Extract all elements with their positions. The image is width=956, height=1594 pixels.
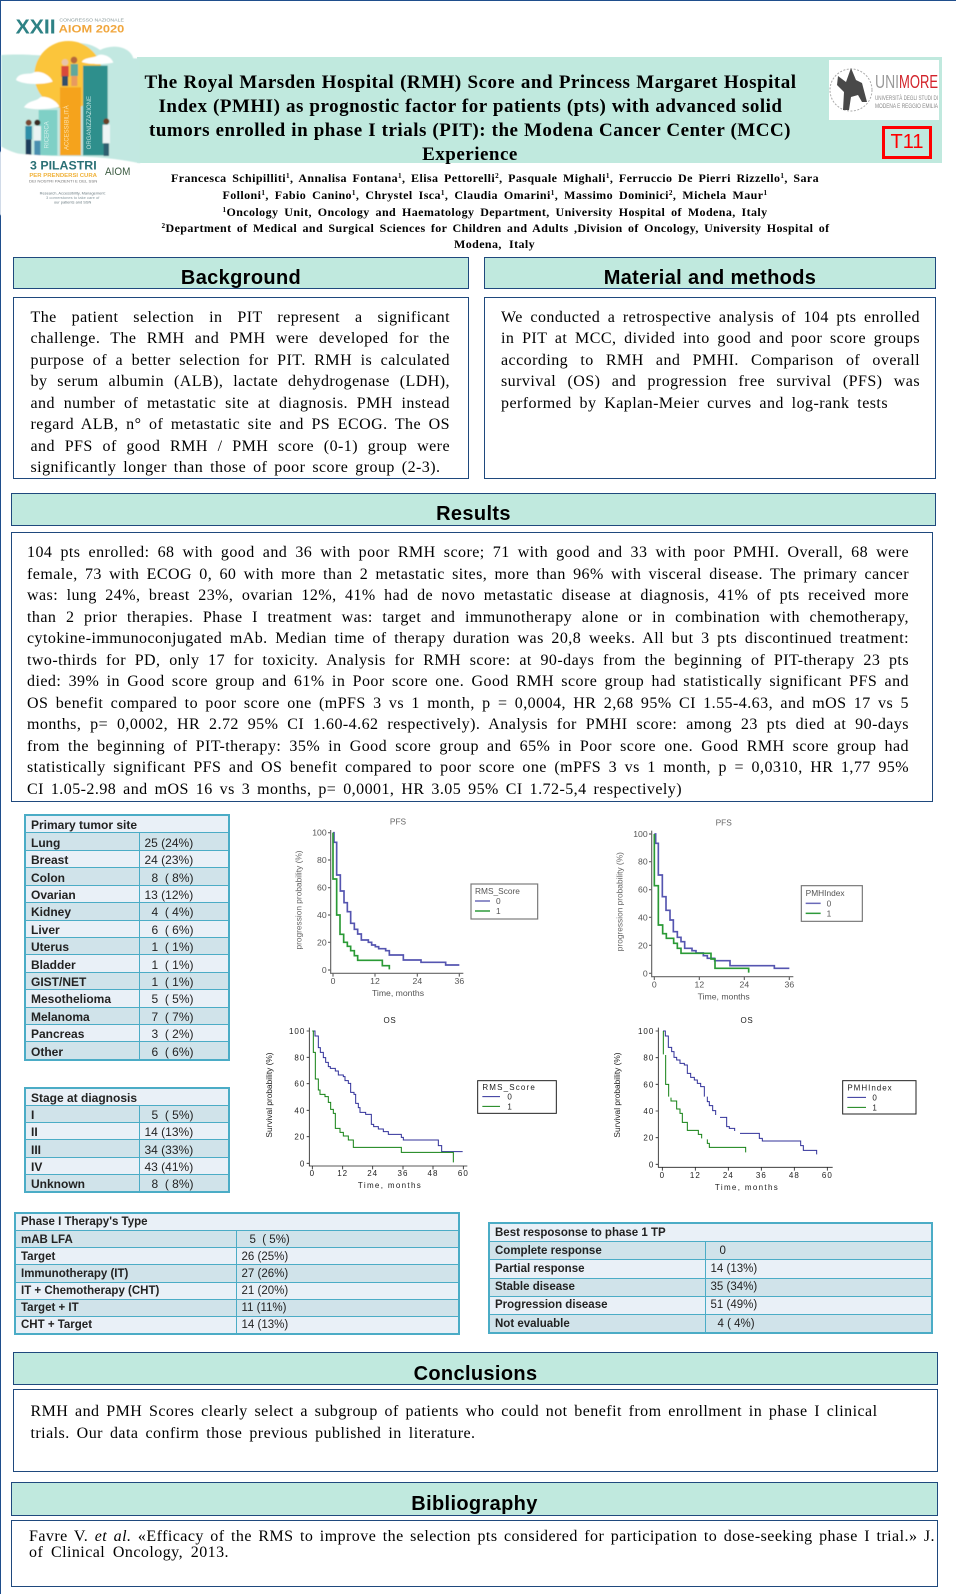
table: phase I therapy type: 26 (25%) bbox=[242, 1251, 288, 1263]
panel: material and methods: We conducted a retrospective analysis of 104 pts enrolled bbox=[501, 308, 920, 326]
chart: OS by PMH index: 20 bbox=[643, 1134, 654, 1143]
chart: PFS by RMS score: 12 bbox=[370, 976, 380, 986]
chart: PFS by PMH index: 20 bbox=[638, 940, 648, 950]
panel: conclusions: trials. Our data confirm those previous published in literature. bbox=[30, 1424, 476, 1442]
table: primary tumor site: 1 ( 1%) bbox=[152, 975, 194, 989]
chart: OS by RMS score bbox=[264, 1016, 556, 1190]
chart: PFS by RMS score: progression probability (%) bbox=[294, 850, 304, 950]
heading: results bbox=[11, 493, 936, 526]
chart: OS by PMH index: 60 bbox=[643, 1080, 654, 1089]
authors and affiliations: Folloni1, Fabio Canino1, Chrystel Isca1, Claudia Omarini1, Massimo Dominici2, Michela Maur1 bbox=[222, 188, 767, 202]
panel: bibliography: Favre V. et al. «Efficacy of the RMS to improve the selection pts considered for participation to dose-seeking phase I trial.» J. bbox=[29, 1528, 935, 1545]
chart: PFS by PMH index: 40 bbox=[638, 912, 648, 922]
table: stage at diagnosis: 14 (13%) bbox=[144, 1125, 193, 1139]
chart: OS by RMS score: 12 bbox=[337, 1169, 348, 1178]
heading: conclusions: Conclusions bbox=[414, 1363, 537, 1385]
chart: OS by RMS score: OS bbox=[384, 1016, 396, 1025]
table: primary tumor site: GIST/NET bbox=[31, 975, 86, 989]
chart: OS by RMS score: 0 bbox=[507, 1093, 512, 1102]
table: stage at diagnosis: Unknown bbox=[31, 1177, 85, 1191]
table: best response to phase 1 TP: Stable disease bbox=[495, 1281, 575, 1293]
table: best response to phase 1 TP: 51 (49%) bbox=[710, 1299, 757, 1311]
chart: PFS by PMH index: 100 bbox=[633, 829, 648, 839]
chart: OS by RMS score: 60 bbox=[294, 1080, 305, 1089]
chart: OS by PMH index: 0 bbox=[872, 1093, 877, 1102]
table: stage at diagnosis: I bbox=[31, 1108, 34, 1122]
university logo: MODENA E REGGIO EMILIA bbox=[875, 104, 938, 110]
panel: results: CI 1.05-2.98 and mOS 16 vs 3 months, p= 0,0001, HR 3.05 95% CI 1.72-5,4 respectively) bbox=[27, 780, 682, 798]
table: primary tumor site: Uterus bbox=[31, 940, 69, 954]
chart: PFS by RMS score: PFS bbox=[390, 817, 407, 827]
chart: OS by PMH index: 12 bbox=[690, 1171, 701, 1180]
table: best response to phase 1 TP: Best resposonse to phase 1 TP bbox=[495, 1227, 666, 1239]
table: primary tumor site: 4 ( 4%) bbox=[152, 905, 194, 919]
chart: PFS by PMH index: 1 bbox=[827, 908, 832, 918]
panel: results: 104 pts enrolled: 68 with good and 36 with poor RMH score; 71 with good and 33 with poor PMHI. Overall, 68 were bbox=[27, 544, 909, 561]
title: tumors enrolled in phase I trials (PIT): the Modena Cancer Center (MCC) bbox=[149, 120, 791, 141]
table: primary tumor site: Colon bbox=[31, 870, 65, 884]
chart: PFS by RMS score: 36 bbox=[455, 976, 464, 986]
chart: OS by RMS score: 36 bbox=[398, 1169, 408, 1178]
table: primary tumor site: Pancreas bbox=[31, 1027, 84, 1041]
chart: PFS by RMS score bbox=[294, 817, 538, 998]
chart: PFS by RMS score: 0 bbox=[496, 896, 501, 906]
chart: PFS by RMS score: 24 bbox=[413, 976, 422, 986]
table: primary tumor site: Primary tumor site bbox=[31, 818, 137, 832]
authors and affiliations: 2Department of Medical and Surgical Sciences for Children and Adults ,Division of Oncology, University Hospital of bbox=[162, 221, 830, 235]
panel: results: from the beginning of PIT-therapy: 35% in Good score group and 65% in Poor score one. Good RMH score group had bbox=[27, 738, 909, 754]
chart: PFS by RMS score: 100 bbox=[312, 828, 327, 838]
chart: PFS by PMH index: PMHIndex bbox=[806, 888, 845, 898]
chart: PFS by PMH index: 80 bbox=[638, 857, 648, 867]
heading: bibliography bbox=[11, 1482, 938, 1516]
chart: PFS by RMS score: 1 bbox=[496, 906, 501, 916]
chart: OS by RMS score: 24 bbox=[367, 1169, 378, 1178]
heading: material and methods bbox=[484, 257, 936, 289]
table: primary tumor site: Liver bbox=[31, 923, 60, 937]
panel: bibliography: of Clinical Oncology, 2013. bbox=[29, 1544, 229, 1561]
chart: OS by RMS score: 1 bbox=[507, 1102, 512, 1111]
table: best response to phase 1 TP: 14 (13%) bbox=[710, 1263, 757, 1275]
chart: OS by PMH index: 1 bbox=[872, 1103, 877, 1112]
chart: OS by PMH index: 100 bbox=[638, 1027, 654, 1036]
table: phase I therapy type: 11 (11%) bbox=[242, 1302, 286, 1314]
poster heading: PER PRENDERSI CURA bbox=[29, 173, 97, 179]
table: phase I therapy type: 14 (13%) bbox=[242, 1319, 288, 1331]
panel: results: than 2 prior therapies. Phase I treatment was: target and immunotherapy alone or in combination with chemotherapy, bbox=[27, 608, 909, 626]
chart: PFS by PMH index: 12 bbox=[695, 979, 704, 989]
panel: material and methods bbox=[484, 297, 936, 479]
table: phase I therapy type: Target + IT bbox=[21, 1302, 79, 1314]
table: phase I therapy type bbox=[14, 1212, 460, 1335]
chart: OS by RMS score: 100 bbox=[289, 1027, 305, 1036]
table: primary tumor site bbox=[24, 814, 230, 1061]
chart: PFS by PMH index: 0 bbox=[652, 979, 657, 989]
table: best response to phase 1 TP: Not evaluable bbox=[495, 1318, 570, 1330]
table: primary tumor site: 8 ( 8%) bbox=[152, 870, 194, 884]
table: phase I therapy type: 21 (20%) bbox=[242, 1285, 288, 1297]
poster heading: RICERCA bbox=[45, 121, 51, 148]
chart: OS by RMS score: RMS_Score bbox=[482, 1083, 536, 1092]
chart: OS by RMS score: 20 bbox=[294, 1133, 305, 1142]
university logo: MORE bbox=[899, 72, 938, 92]
poster heading: AIOM 2020 bbox=[59, 24, 124, 36]
title bbox=[144, 72, 796, 165]
chart: OS by RMS score: 60 bbox=[458, 1169, 469, 1178]
table: primary tumor site: 24 (23%) bbox=[144, 853, 193, 867]
panel: background: The patient selection in PIT represent a significant bbox=[30, 308, 450, 326]
chart: PFS by RMS score: 80 bbox=[317, 855, 327, 865]
chart: OS by PMH index bbox=[612, 1016, 916, 1192]
table: stage at diagnosis: 8 ( 8%) bbox=[152, 1177, 194, 1191]
chart: OS by PMH index: 0 bbox=[660, 1171, 665, 1180]
panel: material and methods: according to RMH and PMHI. Comparison of overall bbox=[501, 352, 920, 369]
panel: results: months, p= 0,0002, HR 2.72 95% CI 1.60-4.62 respectively). Analysis for PMHI score: among 23 pts died at 90-days bbox=[27, 716, 909, 733]
badge T11 bbox=[882, 126, 932, 159]
heading: background: Background bbox=[181, 267, 301, 289]
table: stage at diagnosis: 43 (41%) bbox=[144, 1160, 193, 1174]
chart: OS by PMH index: OS bbox=[741, 1016, 753, 1025]
chart: PFS by RMS score: 40 bbox=[317, 910, 327, 920]
chart: OS by PMH index: Survival probability (%) bbox=[612, 1052, 622, 1138]
poster heading: CONGRESSO NAZIONALE bbox=[59, 18, 124, 23]
table: primary tumor site: 5 ( 5%) bbox=[152, 992, 194, 1006]
badge T11: T11 bbox=[890, 131, 923, 153]
poster heading: our patients and SSN bbox=[54, 201, 92, 205]
table: phase I therapy type: CHT + Target bbox=[21, 1319, 92, 1331]
table: primary tumor site: 3 ( 2%) bbox=[152, 1027, 194, 1041]
congress poster logo bbox=[0, 16, 140, 216]
table: primary tumor site: Bladder bbox=[31, 958, 76, 972]
table: stage at diagnosis: Stage at diagnosis bbox=[31, 1091, 137, 1105]
table: phase I therapy type: Target bbox=[21, 1251, 55, 1263]
charts: RMH score survival curves bbox=[264, 817, 557, 1190]
chart: OS by PMH index: 36 bbox=[756, 1171, 767, 1180]
panel: results: two-thirds for PD, only 17 for toxicity. Analysis for RMH score: at 90-days from the beginning of PIT-therapy 23 pts bbox=[27, 652, 909, 668]
panel: results: female, 73 with ECOG 0, 60 with more than 2 metastatic sites, more than 96% with visceral disease. The primary cancer bbox=[27, 566, 909, 582]
chart: PFS by PMH index: PFS bbox=[716, 817, 732, 827]
poster heading: 3 cornerstones to take care of bbox=[46, 196, 99, 200]
panel: results: cytokine-immunoconjugated mAb. Median time of therapy duration was 20,8 weeks. All but 3 pts discontinued treatment: bbox=[27, 630, 909, 647]
panel: material and methods: in PIT at MCC, divided into good and poor score groups bbox=[501, 330, 920, 347]
heading: conclusions bbox=[13, 1352, 938, 1385]
authors and affiliations bbox=[162, 171, 830, 251]
panel: background: regard ALB, n° of metastatic site and PS ECOG. The OS bbox=[30, 416, 450, 433]
panel: results: was: lung 24%, breast 23%, ovarian 12%, 41% had de novo metastatic disease at diagnosis, 41% of pts received more bbox=[27, 587, 909, 604]
table: best response to phase 1 TP: Complete response bbox=[495, 1245, 602, 1257]
table: stage at diagnosis: III bbox=[31, 1143, 41, 1157]
poster heading: XXII bbox=[16, 16, 56, 39]
chart: PFS by RMS score: 20 bbox=[317, 937, 327, 947]
table: phase I therapy type: mAB LFA bbox=[21, 1234, 73, 1246]
chart: OS by PMH index: 0 bbox=[649, 1160, 654, 1169]
table: primary tumor site: Mesothelioma bbox=[31, 992, 111, 1006]
panel: material and methods: survival (OS) and progression free survival (PFS) was bbox=[501, 373, 920, 390]
chart: PFS by RMS score: 0 bbox=[322, 965, 327, 975]
panel: bibliography bbox=[11, 1520, 938, 1587]
chart: OS by RMS score: 40 bbox=[294, 1106, 305, 1115]
university logo bbox=[829, 60, 939, 120]
title: The Royal Marsden Hospital (RMH) Score and Princess Margaret Hospital bbox=[144, 72, 796, 93]
chart: OS by RMS score: 48 bbox=[428, 1169, 438, 1178]
poster heading bbox=[16, 16, 130, 205]
authors and affiliations: Francesca Schipilliti1, Annalisa Fontana1, Elisa Pettorelli2, Pasquale Mighali1, Ferruccio De Pierri Rizzello1, Sara bbox=[171, 171, 819, 185]
heading: background bbox=[13, 257, 469, 289]
chart: PFS by PMH index: 60 bbox=[638, 885, 648, 895]
chart: OS by PMH index: 60 bbox=[822, 1171, 833, 1180]
poster heading: DEI NOSTRI PAZIENTI E DEL SSN bbox=[29, 179, 98, 183]
table: primary tumor site: Ovarian bbox=[31, 888, 76, 902]
table: stage at diagnosis: II bbox=[31, 1125, 38, 1139]
table: best response to phase 1 TP: 4 ( 4%) bbox=[718, 1318, 755, 1330]
chart: OS by PMH index: 40 bbox=[643, 1107, 654, 1116]
panel: conclusions bbox=[13, 1389, 938, 1472]
title: Index (PMHI) as prognostic factor for patients (pts) with advanced solid bbox=[158, 96, 782, 117]
chart: OS by RMS score: 0 bbox=[310, 1169, 315, 1178]
panel: background: by serum albumin (ALB), lactate dehydrogenase (LDH), bbox=[30, 373, 450, 390]
table: primary tumor site: 25 (24%) bbox=[144, 836, 193, 850]
table: stage at diagnosis bbox=[24, 1087, 230, 1193]
table: stage at diagnosis: 5 ( 5%) bbox=[152, 1108, 194, 1122]
chart: OS by PMH index: PMHIndex bbox=[847, 1084, 893, 1093]
panel: material and methods: performed by Kaplan-Meier curves and log-rank tests bbox=[501, 395, 888, 412]
panel: results: died: 39% in Good score group and 61% in Poor score one. Good RMH score group had statistically significant PFS and bbox=[27, 673, 909, 690]
heading: material and methods: Material and methods bbox=[604, 267, 816, 289]
panel: conclusions: RMH and PMH Scores clearly select a subgroup of patients who could not benefit from enrollment in phase I clinical bbox=[30, 1402, 878, 1420]
chart: OS by RMS score: Survival probability (%) bbox=[264, 1052, 274, 1138]
table: best response to phase 1 TP: Partial response bbox=[495, 1263, 584, 1275]
authors and affiliations: 1Oncology Unit, Oncology and Haematology Department, University Hospital of Modena, Italy bbox=[222, 205, 768, 219]
heading: results: Results bbox=[436, 503, 511, 525]
chart: OS by PMH index: Time, months bbox=[715, 1183, 779, 1192]
table: phase I therapy type: Phase I Therapy's Type bbox=[21, 1216, 148, 1228]
chart: PFS by PMH index: Time, months bbox=[698, 992, 750, 1002]
panel: background: and PFS of good RMH / PMH score (0-1) group were bbox=[30, 438, 450, 455]
university logo: UNIVERSITÀ DEGLI STUDI DI bbox=[875, 95, 938, 102]
chart: PFS by PMH index: 0 bbox=[643, 968, 648, 978]
table: stage at diagnosis: IV bbox=[31, 1160, 42, 1174]
table: stage at diagnosis: 34 (33%) bbox=[144, 1143, 193, 1157]
table: phase I therapy type: Immunotherapy (IT) bbox=[21, 1268, 128, 1280]
panel: results: statistically significant PFS and OS benefit compared to poor score one (mPFS 3 vs 1 month, p = 0,0310, HR 1,77 95% bbox=[27, 759, 909, 776]
table: primary tumor site: Melanoma bbox=[31, 1010, 90, 1024]
panel: background: purpose of a better selection for PIT. RMH is calculated bbox=[30, 352, 450, 369]
university logo: UNI bbox=[875, 72, 899, 92]
table: best response to phase 1 TP: 0 bbox=[720, 1245, 726, 1257]
chart: OS by RMS score: Time, months bbox=[358, 1181, 422, 1190]
panel: results: OS benefit compared to poor score one (mPFS 3 vs 1 month, p = 0,0004, HR 2,68 95% CI 1.55-4.63, and mOS 17 vs 5 bbox=[27, 694, 909, 712]
table: primary tumor site: 6 ( 6%) bbox=[152, 1045, 194, 1059]
poster heading: 3 PILASTRI bbox=[30, 159, 97, 173]
panel: background: challenge. The RMH and PMH were developed for the bbox=[30, 330, 450, 347]
panel: background: significantly longer than those of poor score group (2-3). bbox=[30, 459, 440, 476]
panel: background bbox=[13, 297, 469, 479]
chart: PFS by PMH index bbox=[614, 817, 862, 1002]
poster heading: ACCESSIBILITÀ bbox=[64, 105, 71, 150]
table: best response to phase 1 TP: Progression disease bbox=[495, 1299, 608, 1311]
charts: PMH index survival curves bbox=[612, 817, 916, 1192]
table: primary tumor site: 1 ( 1%) bbox=[152, 958, 194, 972]
table: best response to phase 1 TP bbox=[488, 1222, 933, 1334]
authors and affiliations: Modena, Italy bbox=[454, 237, 535, 251]
chart: PFS by PMH index: 36 bbox=[785, 979, 794, 989]
chart: OS by PMH index: 24 bbox=[723, 1171, 734, 1180]
chart: OS by RMS score: 0 bbox=[300, 1159, 305, 1168]
table: primary tumor site: Breast bbox=[31, 853, 68, 867]
chart: OS by PMH index: 48 bbox=[789, 1171, 800, 1180]
chart: PFS by RMS score: Time, months bbox=[372, 988, 425, 998]
poster heading: AIOM bbox=[105, 166, 130, 178]
table: primary tumor site: 1 ( 1%) bbox=[152, 940, 194, 954]
poster heading: ORGANIZZAZIONE bbox=[87, 96, 93, 149]
table: primary tumor site: 7 ( 7%) bbox=[152, 1010, 194, 1024]
chart: OS by RMS score: 80 bbox=[294, 1053, 305, 1062]
chart: OS by PMH index: 80 bbox=[643, 1054, 654, 1063]
chart: PFS by PMH index: 0 bbox=[827, 898, 832, 908]
table: phase I therapy type: IT + Chemotherapy (CHT) bbox=[21, 1285, 159, 1297]
table: phase I therapy type: 27 (26%) bbox=[242, 1268, 288, 1280]
title: Experience bbox=[422, 144, 518, 165]
chart: PFS by RMS score: 0 bbox=[331, 976, 336, 986]
table: phase I therapy type: 5 ( 5%) bbox=[250, 1234, 290, 1246]
table: primary tumor site: 13 (12%) bbox=[144, 888, 193, 902]
title band bbox=[137, 57, 942, 163]
poster heading: Research, Accessibility, Management: bbox=[40, 191, 106, 195]
heading: bibliography: Bibliography bbox=[411, 1493, 538, 1515]
chart: PFS by PMH index: progression probability (%) bbox=[614, 852, 624, 951]
chart: PFS by PMH index: 24 bbox=[740, 979, 749, 989]
panel: background: and number of metastatic site at diagnosis. PMH instead bbox=[30, 395, 450, 412]
chart: PFS by RMS score: RMS_Score bbox=[475, 886, 520, 896]
panel: results bbox=[11, 532, 933, 802]
table: best response to phase 1 TP: 35 (34%) bbox=[710, 1281, 757, 1293]
chart: PFS by RMS score: 60 bbox=[317, 883, 327, 893]
table: primary tumor site: Other bbox=[31, 1045, 63, 1059]
table: primary tumor site: Lung bbox=[31, 836, 60, 850]
table: primary tumor site: Kidney bbox=[31, 905, 71, 919]
table: primary tumor site: 6 ( 6%) bbox=[152, 923, 194, 937]
